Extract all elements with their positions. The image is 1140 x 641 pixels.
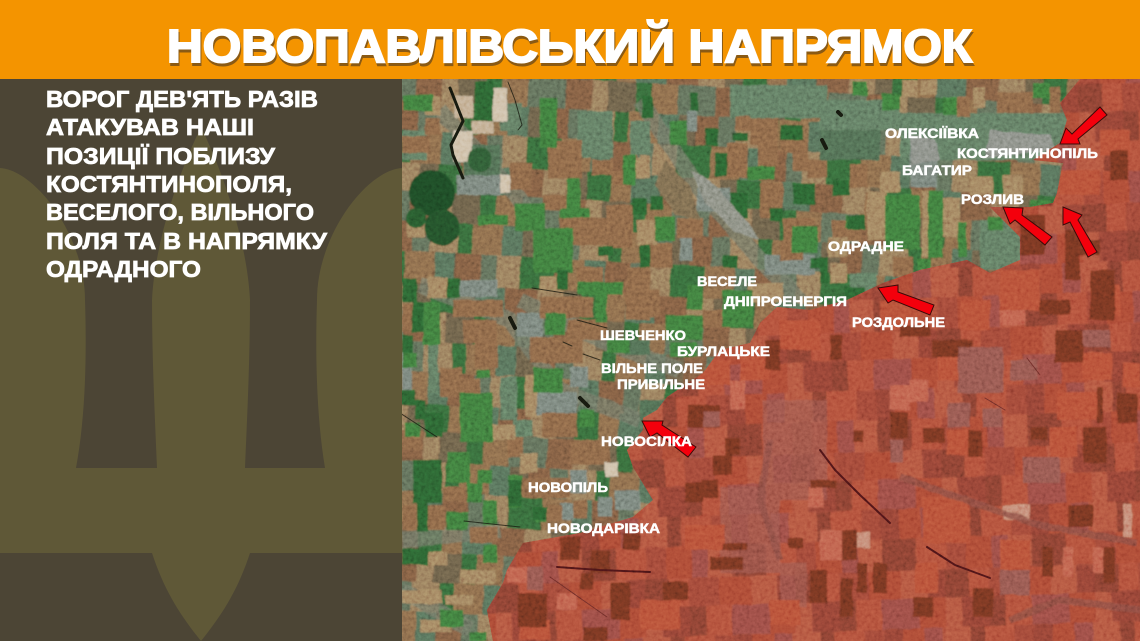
icon: trident emblem watermark bbox=[0, 127, 402, 641]
settlement labels: ВЕСЕЛЕ bbox=[697, 274, 757, 289]
settlement labels: РОЗЛИВ bbox=[961, 192, 1024, 207]
ravines in occupied zone bbox=[550, 358, 1040, 617]
settlement labels: ШЕВЧЕНКО bbox=[600, 328, 686, 343]
arrow: Novosilka bbox=[642, 421, 696, 457]
text block: attack summary: ПОЛЯ ТА В НАПРЯМКУ bbox=[46, 228, 327, 254]
text block: attack summary: ОДРАДНОГО bbox=[46, 256, 201, 282]
title bar bbox=[0, 0, 1140, 79]
settlement labels: НОВОСІЛКА bbox=[601, 434, 692, 449]
rivers and ponds bbox=[400, 82, 841, 527]
settlement labels: БУРЛАЦЬКЕ bbox=[677, 344, 770, 359]
settlement labels: КОСТЯНТИНОПІЛЬ bbox=[957, 146, 1098, 161]
text block: attack summary: ВОРОГ ДЕВ'ЯТЬ РАЗІВ bbox=[46, 86, 318, 112]
satellite map bbox=[395, 70, 1140, 641]
title: НОВОПАВЛІВСЬКИЙ НАПРЯМОК bbox=[168, 23, 974, 75]
map tone adjustment bbox=[402, 79, 1140, 641]
arrow: Rozlyv bbox=[1003, 207, 1052, 245]
settlement labels: БАГАТИР bbox=[902, 163, 972, 178]
settlement labels: НОВОДАРІВКА bbox=[547, 521, 660, 536]
text block: attack summary bbox=[46, 86, 327, 282]
settlement labels: ОДРАДНЕ bbox=[828, 239, 904, 254]
settlement labels: ВІЛЬНЕ ПОЛЕ bbox=[601, 361, 703, 376]
settlement labels: НОВОПІЛЬ bbox=[528, 480, 608, 495]
settlement labels: ПРИВІЛЬНЕ bbox=[617, 377, 705, 392]
left panel background bbox=[0, 79, 402, 641]
text block: attack summary: ВЕСЕЛОГО, ВІЛЬНОГО bbox=[46, 199, 314, 225]
texture grain over map bbox=[402, 79, 1140, 641]
settlement labels bbox=[528, 126, 1098, 536]
settlement labels: РОЗДОЛЬНЕ bbox=[852, 315, 945, 330]
text block: attack summary: КОСТЯНТИНОПОЛЯ, bbox=[46, 171, 292, 197]
arrow: Kostiantynopil bbox=[1060, 107, 1107, 144]
text block: attack summary: АТАКУВАВ НАШІ bbox=[46, 114, 254, 140]
valley bands bbox=[760, 440, 1140, 620]
settlement labels: ОЛЕКСІЇВКА bbox=[885, 126, 979, 141]
occupied territory shaded red bbox=[487, 79, 1140, 641]
town and river flats bbox=[690, 170, 760, 240]
arrow: Rozdolne bbox=[878, 285, 934, 315]
arrow: east of Rozlyv bbox=[1063, 207, 1097, 257]
title: НОВОПАВЛІВСЬКИЙ НАПРЯМОК bbox=[167, 20, 973, 72]
text block: attack summary: ПОЗИЦІЇ ПОБЛИЗУ bbox=[46, 143, 275, 169]
settlement labels: ДНІПРОЕНЕРГІЯ bbox=[724, 294, 847, 309]
